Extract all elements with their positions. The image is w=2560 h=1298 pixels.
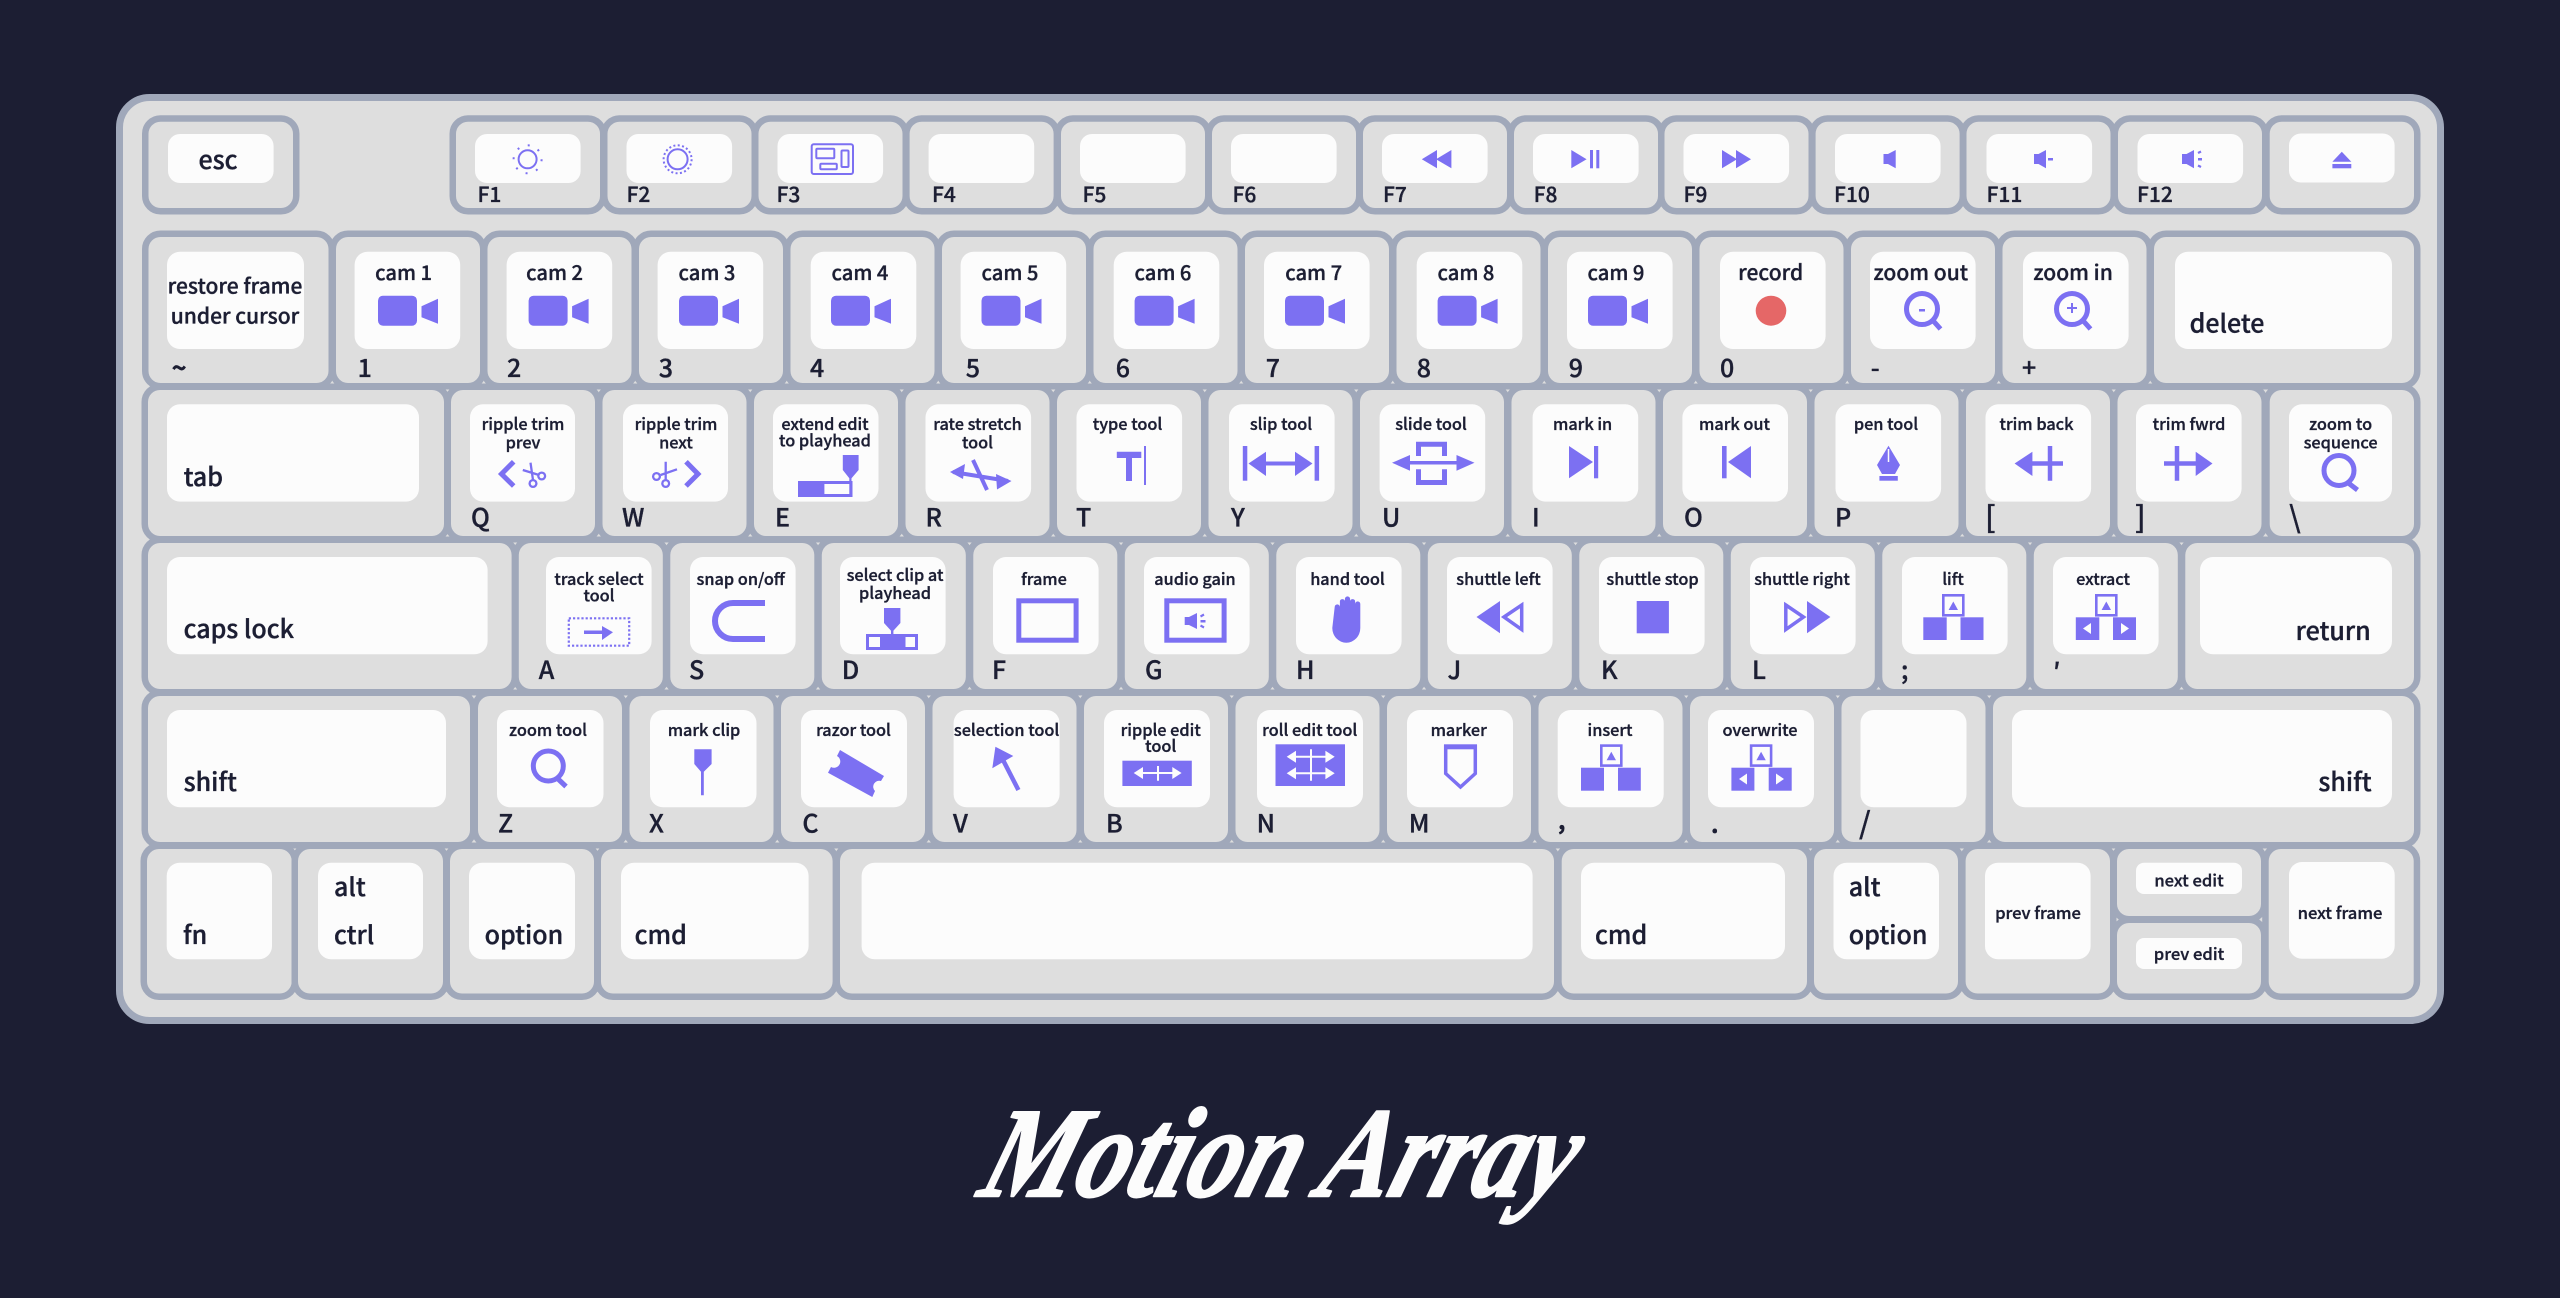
key: R	[906, 390, 1050, 536]
key: 9: cam 9	[1588, 257, 1644, 286]
key: 0 record: 0	[1720, 349, 1734, 385]
key: Y	[1208, 390, 1352, 536]
key: Q: prev	[506, 430, 541, 454]
key: R: tool	[962, 430, 993, 454]
key: E	[754, 390, 898, 536]
key: B: B	[1106, 805, 1123, 841]
key: F8: F8	[1534, 179, 1557, 209]
key: apostrophe extract: ′	[2053, 653, 2060, 689]
key: 8: cam 8	[1438, 257, 1494, 286]
key: slash: /	[1859, 799, 1871, 843]
key: C: razor tool	[816, 717, 891, 741]
key: T: T	[1076, 499, 1091, 535]
key: A: A	[539, 651, 555, 687]
key: prev edit	[2117, 923, 2261, 994]
key: N	[1236, 696, 1380, 842]
key: X: X	[649, 805, 664, 841]
row: QWERTY keys	[148, 390, 2414, 537]
key: semicolon lift: lift	[1942, 566, 1964, 590]
key: F4	[910, 122, 1054, 209]
key: X: mark clip	[668, 717, 740, 741]
key: esc: esc	[198, 141, 238, 177]
key: 3: 3	[659, 349, 673, 385]
key: F9: F9	[1684, 179, 1707, 209]
key: I	[1512, 390, 1656, 536]
key: alt option	[1814, 849, 1958, 994]
key: M: marker	[1431, 717, 1487, 741]
key: 2: 2	[507, 349, 521, 385]
key: D: D	[842, 651, 859, 687]
key: ctrl alt: alt	[334, 868, 366, 904]
key: right shift	[1993, 696, 2414, 842]
key: 7: cam 7	[1285, 257, 1342, 286]
key: semicolon lift: ;	[1901, 651, 1908, 687]
key: next edit	[2117, 849, 2261, 916]
key: S	[670, 543, 814, 689]
key: 2	[488, 237, 632, 385]
row: bottom modifier keys	[147, 849, 2414, 994]
key: F8	[1514, 122, 1658, 209]
key: W	[602, 390, 746, 536]
key: F1: F1	[478, 179, 501, 209]
key: tab: tab	[184, 458, 223, 494]
key: G: audio gain	[1154, 566, 1236, 590]
logo: Motion Array: Motion Array	[965, 1083, 1603, 1224]
key: caps lock: caps lock	[184, 610, 295, 646]
key: I: I	[1532, 499, 1540, 535]
key: Z: zoom tool	[509, 717, 587, 741]
key: F: F	[992, 651, 1006, 687]
key: 5: 5	[966, 349, 980, 385]
key: Q: Q	[471, 499, 490, 535]
key: 7	[1245, 237, 1389, 385]
key: F	[973, 543, 1117, 689]
key: I: mark in	[1553, 411, 1612, 435]
key: delete	[2154, 237, 2414, 383]
key: 5	[942, 237, 1086, 385]
key: T: type tool	[1093, 411, 1162, 435]
key: Q: ripple trim	[482, 411, 564, 435]
key: 1: 1	[358, 349, 372, 385]
key: O: mark out	[1699, 411, 1771, 435]
key: Z: Z	[498, 805, 513, 841]
key: right bracket: trim fwrd	[2153, 411, 2225, 435]
key: W: W	[622, 499, 644, 535]
key: 4: cam 4	[832, 257, 888, 286]
key: backslash: sequence	[2304, 430, 2378, 454]
key: F11: F11	[1986, 179, 2022, 209]
key: E: E	[775, 499, 790, 535]
key: F4: F4	[932, 179, 956, 209]
key: F1	[456, 122, 600, 209]
key: H: hand tool	[1310, 566, 1385, 590]
key: 4: 4	[810, 349, 824, 385]
key: M: M	[1409, 805, 1429, 841]
key: V	[932, 696, 1076, 842]
key: W: ripple trim	[635, 411, 717, 435]
key: ctrl alt: ctrl	[334, 916, 374, 952]
key: tab	[148, 390, 444, 536]
key: U: U	[1382, 499, 1400, 535]
key: F: frame	[1021, 566, 1067, 590]
key: J: shuttle left	[1456, 566, 1541, 590]
key: period overwrite: overwrite	[1722, 717, 1798, 741]
key: prev edit: prev edit	[2154, 941, 2225, 965]
key: E: to playhead	[779, 428, 871, 452]
key: P	[1814, 390, 1958, 536]
key: F12: F12	[2137, 179, 2173, 209]
key: tilde: under cursor	[171, 301, 300, 331]
key: D: playhead	[859, 580, 931, 604]
key: F7: F7	[1383, 179, 1407, 209]
key: V: selection tool	[954, 717, 1059, 741]
key: ctrl alt	[298, 849, 443, 994]
key: tilde: restore frame	[168, 271, 302, 301]
row: ASDF keys	[148, 543, 2414, 689]
key: J: J	[1448, 651, 1461, 687]
key: fn	[147, 849, 292, 994]
key: tilde: ~	[172, 349, 186, 385]
key: eject	[2270, 122, 2414, 208]
key: K	[1579, 543, 1723, 689]
key: 3	[639, 237, 783, 385]
key: M	[1387, 696, 1531, 842]
key: 8: 8	[1417, 349, 1431, 385]
key: slash	[1842, 696, 1986, 843]
key: 1	[336, 237, 480, 385]
key: H	[1276, 543, 1420, 689]
row: function keys	[148, 122, 2414, 209]
key: left cmd: cmd	[635, 916, 687, 952]
key: F9	[1664, 122, 1808, 209]
key: Z	[478, 696, 622, 842]
key: 6: cam 6	[1135, 257, 1191, 286]
key: plus zoom in: zoom in	[2033, 257, 2113, 287]
key: next frame	[2269, 849, 2414, 994]
key: X	[630, 696, 774, 842]
key: 1: cam 1	[375, 257, 432, 286]
key: F6	[1212, 122, 1356, 209]
key: right cmd	[1562, 849, 1807, 994]
key: fn: fn	[183, 916, 207, 952]
key: F3: F3	[776, 179, 800, 209]
key: delete: delete	[2190, 305, 2264, 341]
key: right bracket: ]	[2135, 493, 2146, 537]
key: option: option	[485, 916, 563, 952]
key: R: rate stretch	[933, 411, 1022, 435]
key: apostrophe extract: extract	[2076, 566, 2130, 590]
key: F2: F2	[626, 179, 650, 209]
keyboard body	[120, 98, 2440, 1020]
key: G: G	[1145, 651, 1163, 687]
key: F10	[1816, 122, 1960, 209]
row: number keys	[148, 237, 2414, 385]
key: minus zoom out: zoom out	[1873, 257, 1968, 287]
key: apostrophe extract	[2034, 543, 2178, 689]
key: R: R	[926, 499, 942, 535]
key: alt option: alt	[1849, 868, 1881, 904]
key: minus zoom out	[1851, 237, 1995, 385]
key: Y: Y	[1230, 499, 1245, 535]
key: minus zoom out: -	[1871, 349, 1880, 385]
key: left shift	[148, 696, 470, 842]
key: D: select clip at	[847, 562, 944, 586]
key: A	[519, 543, 663, 689]
key: Y: slip tool	[1250, 411, 1312, 435]
key: K: K	[1601, 651, 1618, 687]
key: C: C	[802, 805, 819, 841]
key: Q	[451, 390, 595, 536]
key: 8	[1396, 237, 1540, 385]
key: F10: F10	[1834, 179, 1870, 209]
key: period overwrite: .	[1711, 805, 1718, 841]
key: B: ripple edit	[1121, 717, 1201, 741]
key: period overwrite	[1690, 696, 1834, 842]
key: 5: cam 5	[982, 257, 1038, 286]
key: esc	[148, 122, 293, 208]
key: plus zoom in	[2002, 237, 2146, 385]
key: G	[1125, 543, 1269, 689]
key: right bracket	[2118, 390, 2262, 537]
key: T	[1057, 390, 1201, 536]
key: D	[822, 543, 966, 689]
key: W: next	[659, 430, 693, 454]
key: B: tool	[1145, 733, 1176, 757]
key: N: roll edit tool	[1262, 717, 1357, 741]
key: 6: 6	[1116, 349, 1130, 385]
key: F12	[2118, 122, 2262, 209]
key: caps lock	[148, 543, 512, 689]
key: L: shuttle right	[1754, 566, 1850, 590]
key: 7: 7	[1266, 349, 1280, 385]
key: 4	[790, 237, 934, 385]
key: comma insert	[1538, 696, 1682, 842]
key: J	[1428, 543, 1572, 689]
key: F11	[1966, 122, 2110, 209]
key: backslash: zoom to	[2309, 411, 2372, 435]
key: comma insert: ,	[1558, 801, 1565, 837]
key: 9	[1548, 237, 1692, 385]
key: left bracket	[1966, 390, 2110, 537]
key: N: N	[1257, 805, 1275, 841]
row: ZXCV keys	[148, 696, 2414, 843]
key: F3	[758, 122, 902, 209]
key: 2: cam 2	[526, 257, 583, 286]
key: prev frame	[1966, 849, 2110, 994]
key: prev frame: prev frame	[1995, 900, 2081, 924]
key: F6: F6	[1232, 179, 1256, 209]
key: O	[1663, 390, 1807, 536]
key: semicolon lift	[1882, 543, 2026, 689]
key: space	[840, 849, 1554, 994]
key: left bracket: trim back	[2000, 411, 2074, 435]
key: C	[781, 696, 925, 842]
key: L: L	[1752, 651, 1766, 687]
key: right shift: shift	[2318, 763, 2372, 799]
key: U	[1360, 390, 1504, 536]
key: 0 record: record	[1738, 257, 1803, 287]
key: F2	[608, 122, 752, 209]
key: option	[450, 849, 594, 994]
key: 6	[1094, 237, 1238, 385]
key: S: S	[689, 651, 704, 687]
key: next edit: next edit	[2154, 868, 2224, 892]
key: backslash: \	[2289, 493, 2301, 537]
key: B	[1084, 696, 1228, 842]
key: 0 record	[1700, 237, 1844, 385]
key: return	[2185, 543, 2414, 689]
key: tilde	[148, 237, 328, 385]
key: backslash	[2270, 390, 2414, 537]
key: comma insert: insert	[1588, 717, 1633, 741]
key: F5	[1061, 122, 1205, 209]
key: P: P	[1835, 499, 1851, 535]
key: A: tool	[583, 583, 615, 607]
key: K: shuttle stop	[1606, 566, 1699, 590]
key: P: pen tool	[1854, 411, 1918, 435]
key: alt option: option	[1849, 916, 1927, 952]
key: left bracket: [	[1985, 493, 1996, 537]
key: F7	[1363, 122, 1507, 209]
key: O: O	[1684, 499, 1703, 535]
key: S: snap on/off	[697, 566, 786, 590]
key: left shift: shift	[184, 763, 237, 799]
key: plus zoom in: +	[2022, 349, 2036, 385]
key: H: H	[1296, 651, 1315, 687]
key: next frame: next frame	[2298, 900, 2382, 924]
key: E: extend edit	[781, 411, 869, 435]
key: V: V	[952, 805, 968, 841]
key: 3: cam 3	[679, 257, 735, 286]
key: return: return	[2296, 612, 2371, 648]
key: right cmd: cmd	[1595, 916, 1647, 952]
key: U: slide tool	[1395, 411, 1467, 435]
key: A: track select	[554, 566, 644, 590]
key: left cmd	[601, 849, 833, 994]
key: L	[1731, 543, 1875, 689]
key: F5: F5	[1082, 179, 1106, 209]
key: 9: 9	[1569, 349, 1583, 385]
